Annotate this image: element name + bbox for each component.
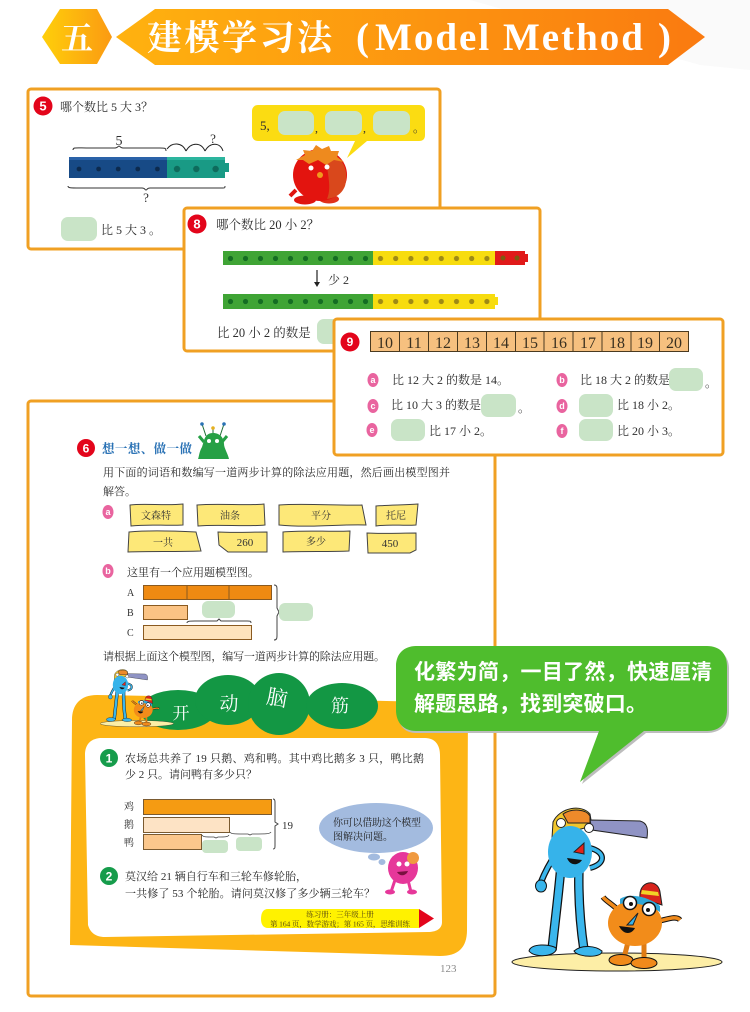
- word cards: 多少: [306, 535, 326, 548]
- number strip 10 to 20: 20: [666, 335, 682, 352]
- practice reference tag: 练习册：三年级上册: [306, 909, 374, 919]
- speech bubble: number sequence: ,: [315, 121, 318, 135]
- number strip 10 to 20: [370, 331, 688, 352]
- callout: green speech bubble: 解题思路，找到突破口。: [414, 692, 647, 716]
- panel: question 8: 哪个数比 20 小 2？: [216, 217, 319, 232]
- number strip 10 to 20: 18: [609, 335, 625, 352]
- practice reference tag: [261, 909, 434, 930]
- number strip 10 to 20: 17: [580, 335, 596, 352]
- item b: b: [559, 375, 565, 385]
- word cards: 260: [237, 537, 254, 549]
- item f: 比 20 小 3。: [617, 424, 680, 438]
- panel: question 5: [28, 89, 440, 249]
- speech bubble: number sequence: [252, 105, 425, 158]
- item d: 比 18 小 2。: [617, 398, 680, 412]
- word cards: [128, 504, 418, 553]
- item f: [556, 419, 680, 441]
- title banner: ): [658, 16, 671, 59]
- arrow: minus two: 少 2: [328, 272, 349, 287]
- marker a: a: [105, 507, 111, 517]
- item a: 比 12 大 2 的数是 14。: [392, 372, 509, 387]
- callout: green speech bubble: 化繁为简，一目了然，快速厘清: [414, 660, 712, 684]
- panel: question 9: 9: [347, 335, 354, 349]
- cube train: 5 plus 3: 5: [116, 134, 122, 149]
- title banner: [116, 9, 705, 65]
- item c: [368, 394, 530, 417]
- cube train: 5 plus 3: ?: [143, 190, 149, 205]
- title banner: (: [356, 16, 369, 59]
- number strip 10 to 20: 10: [377, 335, 393, 352]
- illustration: blue and orange characters: [512, 808, 722, 971]
- text block: instructions: 用下面的词语和数编写一道两步计算的除法应用题，然后画出模型图并: [103, 465, 450, 479]
- question 1: [100, 749, 424, 781]
- item b: 比 18 大 2 的数是: [580, 372, 670, 387]
- bar model: poultry: [124, 799, 294, 853]
- thought bubble: 你可以借助这个模型: [333, 816, 421, 829]
- icon: red monster: [290, 145, 347, 204]
- text: compose problem: 请根据上面这个模型图，编写一道两步计算的除法应用题。: [103, 649, 385, 663]
- thought bubble: [319, 803, 433, 865]
- item c: 比 10 大 3 的数是: [391, 397, 481, 412]
- answer line: [61, 217, 161, 241]
- heading clouds: 脑: [265, 684, 289, 712]
- number strip 10 to 20: 12: [435, 335, 451, 352]
- arrow: minus two: [314, 270, 349, 287]
- word cards: 一共: [153, 536, 173, 549]
- answer line: 比 20 小 2 的数是: [217, 325, 311, 340]
- cube train: 5 plus 3: [68, 131, 229, 205]
- badge: section number: 五: [61, 20, 93, 56]
- icon: green alien: [198, 422, 229, 459]
- word cards: 450: [382, 538, 399, 550]
- bar model: A B C: [127, 585, 313, 640]
- question 1: 农场总共养了 19 只鹅、鸡和鸭。其中鸡比鹅多 3 只，鸭比鹅: [125, 751, 424, 765]
- word cards: 文森特: [141, 509, 171, 522]
- text block: instructions: [103, 465, 450, 498]
- title banner: 建模学习法: [147, 19, 335, 58]
- heading: think and do: [77, 439, 192, 457]
- bar model: A B C: C: [127, 628, 134, 639]
- marker b with prompt: 这里有一个应用题模型图。: [127, 565, 259, 579]
- heading clouds: 筋: [331, 696, 349, 716]
- number strip 10 to 20: 13: [464, 335, 480, 352]
- word cards: 托尼: [386, 509, 406, 522]
- word cards: 平分: [311, 509, 331, 522]
- bar model: poultry: 鹅: [124, 818, 134, 831]
- item e: 比 17 小 2。: [429, 424, 492, 438]
- number strip 10 to 20: 11: [406, 335, 422, 352]
- practice reference tag: 第 164 页，数学游戏；第 165 页，思维训练: [270, 918, 410, 930]
- heading clouds: 开: [172, 704, 190, 723]
- question 1: 1: [106, 752, 113, 766]
- text block: instructions: 解答。: [103, 484, 136, 498]
- panel: question 9: [334, 319, 723, 455]
- item c: 。: [518, 401, 530, 415]
- item a: a: [370, 375, 376, 385]
- item e: e: [369, 425, 375, 435]
- question 2: [100, 867, 375, 900]
- heading: think and do: 想一想、做一做: [102, 441, 192, 456]
- cube train: 20 cubes: [223, 251, 528, 265]
- cube train: 18 cubes: [223, 294, 498, 309]
- item b: 。: [705, 376, 717, 390]
- panel: main textbook page: [28, 401, 495, 996]
- bar model: poultry: 鸭: [124, 836, 134, 849]
- question 2: 莫汉给 21 辆自行车和三轮车修轮胎，: [125, 869, 307, 883]
- bar model: poultry: 19: [282, 820, 294, 832]
- word cards: 油条: [220, 509, 240, 522]
- speech bubble: number sequence: 。: [413, 121, 425, 135]
- question 2: 2: [106, 870, 113, 884]
- heading clouds: 动: [219, 693, 239, 715]
- item f: f: [560, 426, 564, 436]
- number strip 10 to 20: 16: [551, 335, 567, 352]
- question 2: 一共修了 53 个轮胎。请问莫汉修了多少辆三轮车？: [125, 886, 375, 900]
- item c: c: [370, 401, 376, 411]
- marker a: [102, 505, 114, 519]
- mini characters: [100, 669, 174, 727]
- bar model: A B C: B: [127, 608, 134, 619]
- cube train: 5 plus 3: ?: [210, 131, 216, 146]
- thought bubble: 图解决问题。: [333, 830, 393, 843]
- number strip 10 to 20: 19: [637, 335, 653, 352]
- speech bubble: number sequence: ,: [363, 121, 366, 135]
- panel: question 5: 5: [39, 98, 47, 114]
- icon: pink monster: [385, 852, 419, 894]
- marker b with prompt: [102, 564, 259, 579]
- question 1: 少 2 只。请问鸭有多少只？: [125, 767, 257, 781]
- speech bubble: number sequence: 5,: [260, 118, 270, 133]
- badge: section number: [42, 9, 112, 64]
- item e: [366, 419, 492, 441]
- bar model: A B C: A: [127, 588, 135, 599]
- heading clouds: [140, 673, 378, 735]
- answer line: [217, 319, 347, 344]
- panel: question 5: 哪个数比 5 大 3？: [60, 99, 153, 114]
- panel: brain teaser: [70, 669, 468, 956]
- number strip 10 to 20: 15: [522, 335, 538, 352]
- title banner: Model Method: [375, 16, 643, 59]
- item d: [556, 394, 680, 417]
- page number: 123: [440, 963, 457, 975]
- panel: question 8: 8: [193, 216, 201, 232]
- marker b with prompt: b: [105, 566, 111, 576]
- bar model: poultry: 鸡: [124, 800, 134, 813]
- header corner shade: [470, 0, 750, 70]
- callout: green speech bubble: [396, 646, 729, 784]
- answer line: 比 5 大 3 。: [101, 222, 161, 237]
- item d: d: [559, 401, 565, 411]
- item b: [556, 368, 717, 391]
- panel: question 8: [184, 208, 540, 351]
- heading: think and do: 6: [83, 442, 90, 456]
- number strip 10 to 20: 14: [493, 335, 509, 352]
